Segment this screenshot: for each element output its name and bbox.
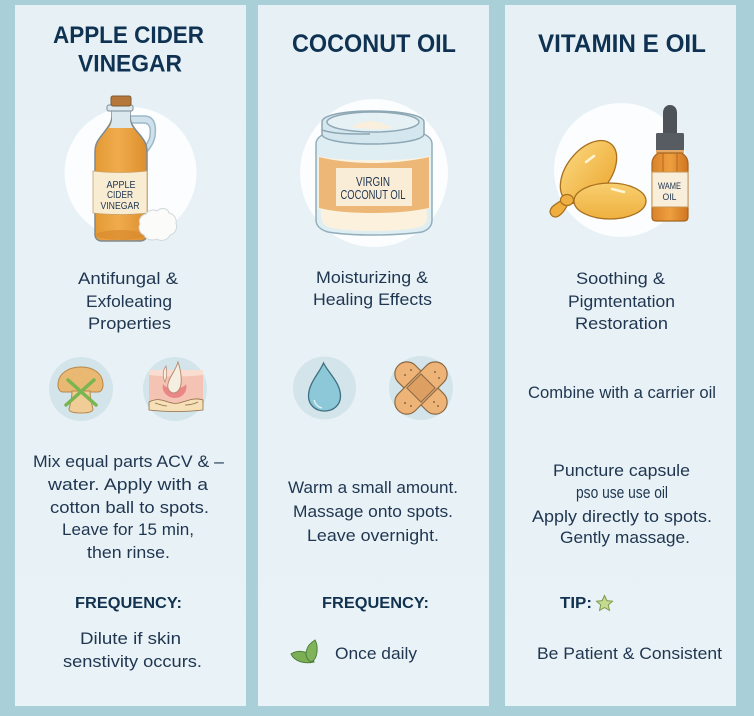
subtitle: soothing and pigmentation — [568, 269, 675, 333]
subtitle: soothing and pigmentation: Soothing & — [576, 269, 666, 288]
panel: vitamin e oil — [505, 5, 736, 706]
dropper label text: WAME — [658, 181, 681, 192]
instructions text: water. Apply with a — [47, 475, 209, 494]
instructions text — [288, 478, 458, 545]
frequency note: Dilute if skin — [80, 629, 181, 648]
subtitle: soothing and pigmentation: Pigmtentation — [568, 292, 675, 311]
jar label text — [340, 175, 406, 202]
instructions text: Warm a small amount. — [288, 478, 458, 497]
subtitle: moisturizing and healing: Moisturizing & — [316, 268, 429, 287]
jar label text: COCONUT OIL — [340, 188, 406, 202]
tip text: Be Patient & Consistent — [537, 644, 722, 663]
dropper label text — [658, 181, 681, 203]
instructions text: Gently massage. — [560, 528, 690, 547]
icon: crossed bandages — [376, 343, 466, 433]
instructions text: Massage onto spots. — [293, 502, 453, 521]
subtitle: soothing and pigmentation: Restoration — [575, 314, 668, 333]
dropper label text: OIL — [662, 192, 676, 203]
icon: water drop — [293, 356, 356, 420]
bottle label text: VINEGAR — [100, 200, 140, 212]
instructions text: Leave for 15 min, — [62, 520, 194, 539]
frequency heading: FREQUENCY: — [322, 595, 429, 612]
bottle label text — [100, 179, 140, 212]
heading: apple cider vinegar: APPLE CIDER — [53, 22, 204, 49]
heading: coconut oil: COCONUT OIL — [292, 30, 456, 58]
instructions text: Mix equal parts ACV & – — [33, 452, 225, 471]
icon: star — [596, 596, 612, 610]
jar label text: VIRGIN — [356, 175, 390, 189]
frequency heading: FREQUENCY: — [75, 595, 182, 612]
panel: coconut oil — [258, 5, 489, 706]
subtitle: moisturizing and healing — [313, 268, 432, 309]
instructions text: cotton ball to spots. — [50, 498, 209, 517]
instructions text: then rinse. — [87, 543, 170, 562]
instructions text: Leave overnight. — [307, 526, 439, 545]
tip heading: TIP: — [560, 595, 592, 612]
icon: coconut oil jar — [300, 99, 448, 247]
frequency value: Once daily — [335, 644, 418, 663]
bottle label text: APPLE — [106, 179, 136, 191]
instructions text — [33, 452, 225, 562]
subtitle: antifungal and exfoliating — [78, 269, 179, 333]
heading: apple cider vinegar — [53, 22, 204, 78]
panel: apple cider vinegar — [15, 5, 246, 706]
instructions text: Puncture capsule — [553, 461, 690, 480]
subtitle: antifungal and exfoliating: Antifungal & — [78, 269, 179, 288]
subtitle: antifungal and exfoliating: Properties — [88, 314, 171, 333]
icon: skin follicle cross-section — [143, 357, 207, 421]
instructions text — [532, 461, 712, 547]
heading: apple cider vinegar: VINEGAR — [78, 50, 182, 78]
icon: crossed-out mushroom — [49, 357, 113, 421]
instructions text: pso use use oil — [576, 483, 668, 502]
subtitle: moisturizing and healing: Healing Effects — [313, 290, 432, 309]
carrier oil note: Combine with a carrier oil — [528, 383, 716, 402]
frequency note — [63, 629, 202, 671]
icon: vinegar bottle with cotton ball — [64, 96, 196, 241]
instructions text: Apply directly to spots. — [532, 507, 712, 526]
icon: capsules and dropper bottle — [549, 103, 688, 237]
frequency note: senstivity occurs. — [63, 652, 202, 671]
subtitle: antifungal and exfoliating: Exfoleating — [86, 292, 172, 311]
heading: vitamin e oil: VITAMIN E OIL — [538, 30, 706, 58]
bottle label text: CIDER — [107, 189, 133, 201]
icon: green leaves — [291, 640, 317, 663]
